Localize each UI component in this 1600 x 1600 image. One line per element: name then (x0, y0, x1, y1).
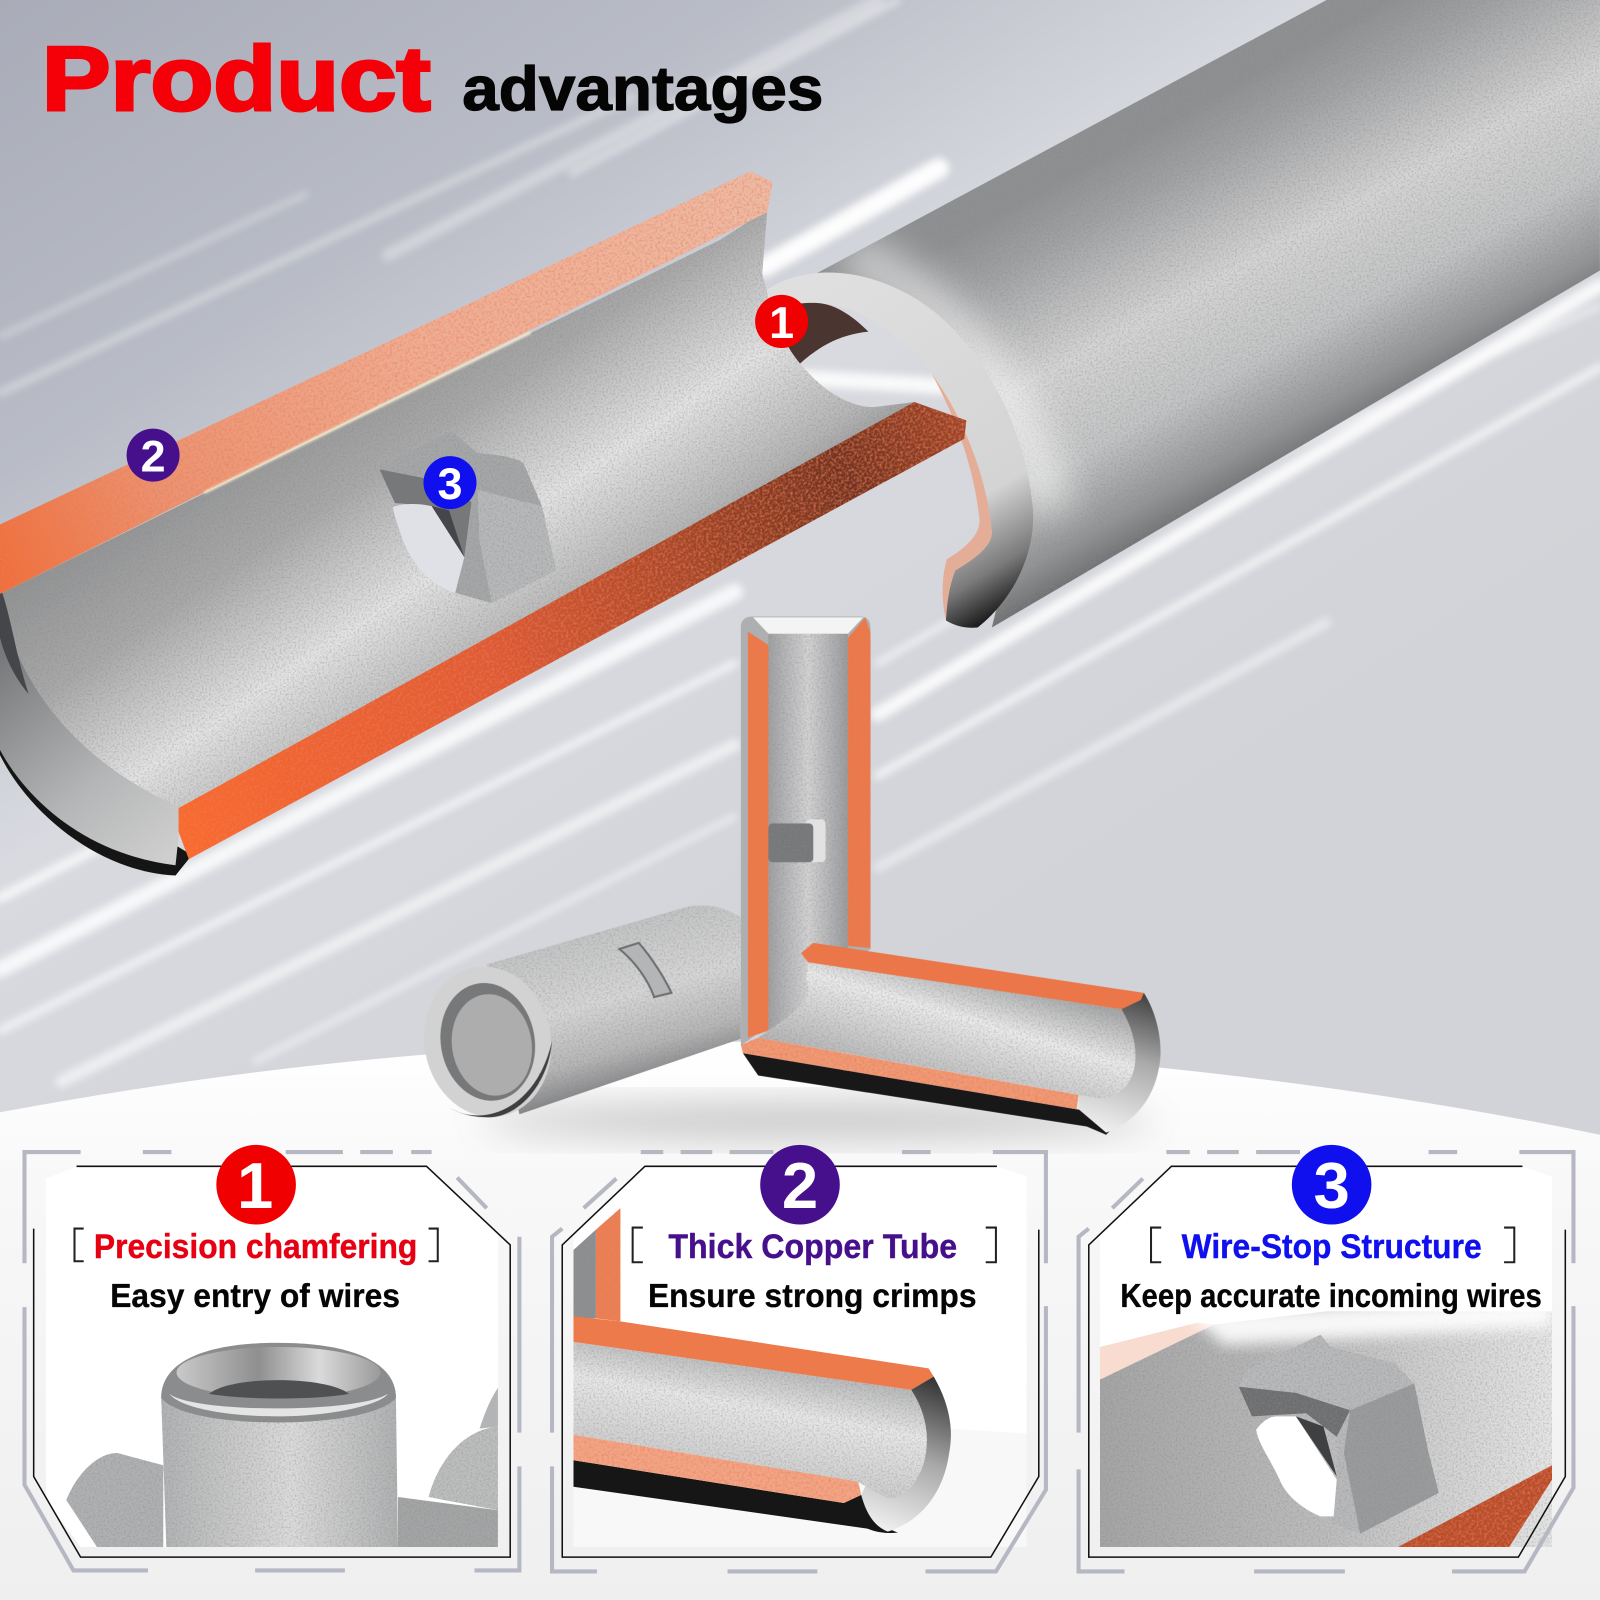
panel 2 subtitle: Ensure strong crimps (648, 1278, 977, 1315)
bore bottom (209, 1380, 349, 1398)
panel 1 number badge: 1 (237, 1149, 273, 1222)
connector body (487, 905, 741, 1114)
upper copper face (0, 171, 772, 594)
lower copper (573, 1435, 861, 1503)
wire stop dark band (380, 469, 471, 557)
black underside (573, 1460, 898, 1533)
copper glow line (204, 333, 531, 493)
ring pink inner band (932, 373, 992, 620)
top copper (801, 943, 1144, 1009)
black underside (743, 1053, 1122, 1135)
panel 1 product close-up (66, 1343, 498, 1547)
main tube (161, 1343, 398, 1547)
closed connector lying left (412, 905, 741, 1127)
badge: 3 on tube (423, 456, 477, 509)
top fade (1184, 1301, 1552, 1345)
internal stop (768, 819, 826, 862)
panel 3 heading: Wire-Stop Structure (1182, 1228, 1482, 1266)
connector slot (619, 943, 671, 997)
panel 3 number badge (1292, 1145, 1371, 1224)
copper wedge (1398, 1465, 1552, 1547)
panel 3 white card (1100, 1166, 1552, 1547)
badge: 2 on tube (127, 429, 180, 482)
wire stop body (380, 432, 556, 603)
title (42, 29, 823, 130)
silver interior (768, 634, 848, 1037)
inner silver (758, 962, 1135, 1098)
inner silver (573, 1342, 927, 1498)
lower copper (741, 1038, 1079, 1109)
vertical copper (596, 1208, 620, 1321)
panel 2 number badge: 2 (782, 1149, 818, 1222)
stop opening (1256, 1416, 1337, 1516)
large tube: cut half (0, 171, 966, 876)
panel 1 number badge (216, 1145, 296, 1224)
left end dark inside (0, 587, 29, 694)
panel 3 product close-up (1100, 1301, 1552, 1547)
outer dark edge (0, 653, 192, 876)
wire stop opening (393, 504, 464, 593)
chamfer band (161, 1343, 396, 1422)
tube body (816, 0, 1600, 628)
title: Product (42, 29, 431, 130)
stop body (1239, 1335, 1439, 1534)
lit area beside the ring (847, 255, 1051, 510)
chamfer ring (762, 273, 1033, 628)
wire stop front face (478, 490, 556, 603)
silver outer edge (741, 616, 870, 1046)
vertical cut connector (741, 616, 870, 1046)
right tube behind (398, 1497, 498, 1547)
panel 3 number badge: 3 (1313, 1149, 1350, 1222)
connector end face (412, 956, 563, 1127)
left end rim (0, 587, 182, 865)
panel 2 number badge (760, 1145, 840, 1224)
bore (176, 1347, 380, 1392)
panel 3: wire-stop structure (1079, 1145, 1573, 1571)
panel 2 grey dashed frame (552, 1152, 1046, 1571)
left tube behind (66, 1453, 163, 1547)
badge: 1 on tube (755, 295, 808, 348)
inner silver (0, 209, 914, 808)
panel 2 product close-up (573, 1208, 1027, 1547)
floor shadow under connectors (480, 1102, 1153, 1139)
wire stop dark slot (432, 506, 464, 557)
panel 2: thick copper tube (552, 1145, 1046, 1571)
panel 1 subtitle: Easy entry of wires (110, 1278, 400, 1315)
white top chamfer (753, 617, 863, 634)
white curved platform (0, 1042, 1600, 1600)
badge: 3 on tube: 3 (438, 458, 462, 509)
end rim (1079, 993, 1161, 1133)
panel 3 subtitle: Keep accurate incoming wires (1120, 1278, 1542, 1315)
badge: 2 on tube: 2 (141, 430, 166, 481)
stop dark underside (1239, 1387, 1350, 1437)
left copper (748, 632, 768, 1038)
panel 1 grey dashed frame (24, 1152, 519, 1570)
top copper (573, 1316, 934, 1390)
panel 3 black frame (1089, 1166, 1565, 1557)
ring inner shadow wedge (735, 303, 868, 371)
panel 1 black frame (34, 1166, 510, 1557)
panel 1 white card (46, 1166, 498, 1547)
end rim (861, 1377, 951, 1532)
panel 2 white card (573, 1166, 1027, 1547)
wire stop (380, 432, 556, 603)
panel 2 heading: Thick Copper Tube (668, 1228, 957, 1266)
floor tone (573, 1429, 1027, 1547)
panel 1 heading: Precision chamfering (94, 1228, 417, 1266)
right half-cut connector (741, 943, 1161, 1135)
panel 2 black frame (562, 1166, 1039, 1557)
stop dark slot (1296, 1416, 1337, 1477)
right copper (848, 617, 870, 948)
silver surface (1100, 1311, 1552, 1547)
pale copper edge (1100, 1322, 1214, 1380)
title: advantages (462, 55, 823, 124)
background light streaks (0, 0, 1600, 1082)
connector group: center product (412, 616, 1161, 1135)
large tube: right half (735, 0, 1600, 628)
panel 1: precision chamfering (24, 1145, 519, 1570)
stop front face (1344, 1384, 1439, 1534)
lower copper face (179, 402, 966, 859)
vertical silver (573, 1230, 596, 1318)
panel 3 grey dashed frame (1079, 1152, 1573, 1571)
badge: 1 on tube: 1 (769, 297, 794, 348)
